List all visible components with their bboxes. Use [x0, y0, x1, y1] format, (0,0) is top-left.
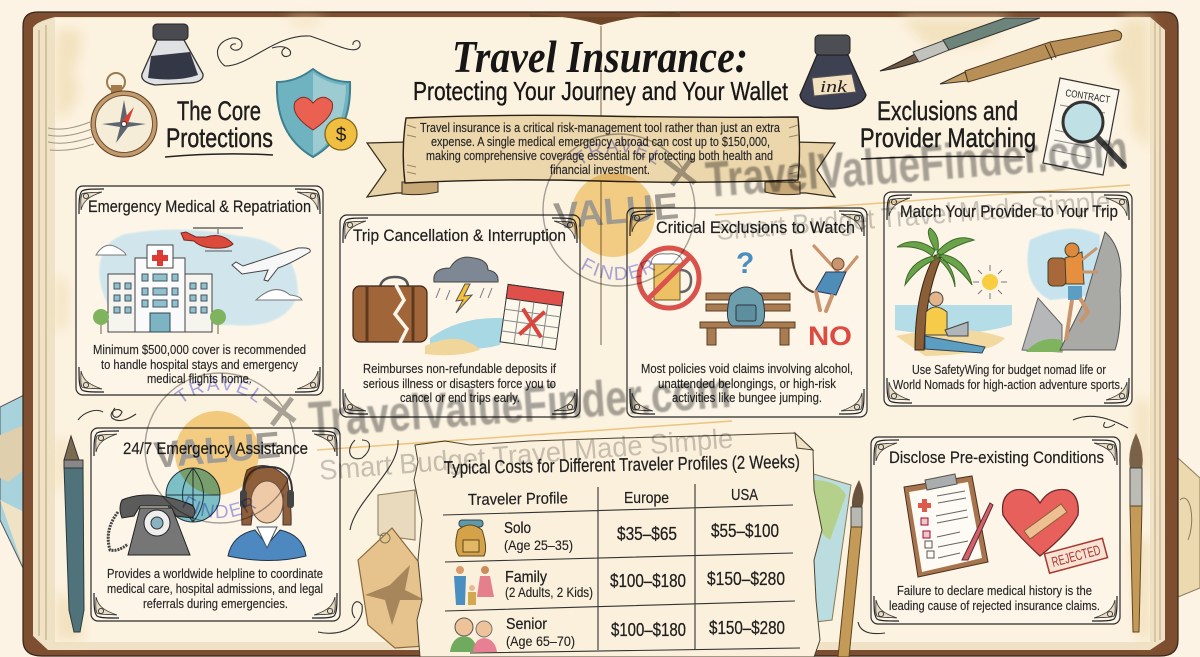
icon: compass [91, 73, 157, 157]
intro text: expense. A single medical emergency abroad can cost up to $150,000, [431, 134, 770, 149]
icon: rotary telephone [108, 495, 195, 555]
body text: cancel or end trips early. [400, 390, 520, 405]
heading: Critical Exclusions to Watch [656, 218, 855, 237]
panel: typical costs table [414, 433, 822, 657]
heading: the core protections: The Core [177, 96, 261, 126]
body text: unattended belongings, or high-risk [658, 376, 836, 391]
stamp: rejected [1044, 538, 1108, 573]
illustration: rock climber [1022, 229, 1121, 352]
illustration: broken suitcase, storm and calendar [353, 257, 564, 355]
watermark: travel value finder bottom: TRAVEL [174, 376, 259, 403]
body text [107, 566, 323, 611]
illustration: hospital, helicopter and plane [93, 228, 310, 334]
table header: Europe [624, 490, 669, 507]
body text: serious illness or disasters force you to [363, 376, 556, 391]
illustration: palm tree and laptop on beach [895, 228, 1012, 356]
row: family: (2 Adults, 2 Kids) [505, 584, 593, 600]
icon: ink bottle right: ink [820, 77, 848, 96]
body text: Provides a worldwide helpline to coordinate [107, 566, 323, 581]
body text: medical care, hospital admissions, and legal [107, 581, 323, 596]
panel: emergency medical and repatriation [76, 186, 323, 395]
watermark: travel value finder top: TRAVEL [573, 138, 658, 165]
decorative swirls [78, 408, 1128, 634]
watermark: travel value finder bottom: VALUE [152, 424, 282, 476]
intro text [420, 120, 781, 177]
icon: backpack [456, 520, 486, 556]
icon: seniors [450, 618, 497, 652]
icon: map behind table [790, 470, 851, 625]
icon: clipboard [904, 474, 993, 577]
body text: Minimum $500,000 cover is recommended [93, 342, 306, 357]
body text: leading cause of rejected insurance claims. [889, 598, 1100, 613]
panel: critical exclusions to watch [627, 208, 867, 417]
icon: luggage tag with compass rose [358, 490, 440, 648]
heading: Trip Cancellation & Interruption [353, 226, 566, 245]
watermark: travel value finder top [542, 120, 1130, 287]
postmark lines [48, 122, 94, 150]
watermark: travel value finder bottom: TravelValueFinder.com [307, 362, 733, 448]
left map scrap [0, 395, 24, 570]
table header: Traveler Profile [468, 490, 568, 509]
right map scrap [1178, 458, 1200, 597]
illustration: bench, backpack and question mark [700, 247, 795, 345]
watermark: travel value finder bottom: Smart Budget Travel Made Simple [318, 423, 734, 486]
row: solo: (Age 25–35) [504, 537, 573, 553]
row: family: $150–$280 [707, 569, 785, 589]
table header: USA [731, 487, 758, 504]
heading: exclusions and provider matching [860, 96, 1036, 159]
body text: Use SafetyWing for budget nomad life or [912, 362, 1106, 377]
icon: globe [166, 468, 220, 522]
watermark: travel value finder top: FINDER [581, 258, 656, 280]
row: solo: $35–$65 [617, 524, 677, 544]
row: solo: $55–$100 [711, 521, 779, 541]
intro text: financial investment. [550, 162, 650, 177]
table title: Typical Costs for Different Traveler Profiles (2 Weeks) [444, 451, 800, 478]
heading: exclusions and provider matching: Provider Matching [860, 123, 1036, 153]
body text [889, 583, 1100, 613]
body text: Reimburses non-refundable deposits if [363, 361, 556, 376]
heading: exclusions and provider matching: Exclusions and [877, 96, 1018, 126]
icon: contract and magnifier: CONTRACT [1065, 88, 1111, 106]
row: solo: Solo [504, 520, 531, 537]
row: senior [450, 616, 785, 652]
body text [893, 362, 1123, 392]
body text: Most policies void claims involving alcohol, [641, 361, 853, 376]
table grid [443, 484, 800, 653]
panel: match your provider to your trip [884, 192, 1132, 406]
ribbon tails [367, 142, 408, 197]
intro ribbon banner [367, 115, 835, 197]
watermark: travel value finder top: Smart Budget Travel Made Simple [715, 185, 1111, 246]
intro text: Travel insurance is a critical risk-management tool rather than just an extra [420, 120, 781, 135]
heading: Emergency Medical & Repatriation [88, 197, 311, 216]
icon: brush beside table [838, 480, 863, 657]
icon: contract and magnifier [1043, 78, 1124, 175]
body text [641, 361, 853, 405]
heading: Match Your Provider to Your Trip [900, 202, 1118, 221]
book spine [600, 26, 602, 345]
title: Protecting Your Journey and Your Wallet [413, 76, 789, 106]
icon: ink bottle left [142, 24, 203, 85]
watermark: travel value finder top: VALUE [552, 185, 680, 237]
heading: 24/7 Emergency Assistance [123, 439, 308, 458]
illustration: no alcohol sign [639, 248, 699, 308]
icon: right paintbrush [1129, 433, 1143, 632]
watermark: travel value finder bottom: FINDER [182, 496, 256, 518]
body text: activities like bungee jumping. [672, 390, 822, 405]
illustration: bungee jumper [791, 246, 857, 311]
body text: World Nomads for high-action adventure sports. [893, 377, 1123, 392]
body text: to handle hospital stays and emergency [101, 357, 298, 372]
row: solo [456, 520, 779, 556]
title [413, 31, 789, 106]
icon: shield with heart and coin: $ [336, 125, 347, 146]
icon: paintbrush [880, 18, 1040, 71]
row: senior: (Age 65–70) [506, 633, 575, 649]
row: family [454, 566, 785, 605]
NO label: NO [808, 321, 852, 351]
icon: shield with heart and coin [277, 69, 357, 157]
table header [468, 487, 758, 509]
body text [93, 342, 306, 386]
torn paper [414, 433, 822, 657]
row: senior: $100–$180 [611, 620, 686, 640]
panel: 24/7 emergency assistance [91, 428, 340, 621]
heading: the core protections: Protections [166, 123, 273, 153]
body text [363, 361, 556, 405]
icon: support agent [228, 466, 306, 560]
row: senior: $150–$280 [709, 618, 785, 638]
illustration: bench, backpack and question mark: ? [736, 247, 754, 280]
panel: disclose pre-existing conditions [871, 437, 1120, 624]
ribbon curls [402, 182, 800, 195]
row: family: $100–$180 [610, 571, 686, 591]
heading: Disclose Pre-existing Conditions [889, 448, 1104, 467]
icon: family [454, 566, 494, 605]
ribbon body [403, 115, 800, 183]
row: family: Family [505, 569, 547, 586]
watermark: travel value finder bottom [144, 362, 734, 524]
icon: fountain pen [940, 30, 1122, 84]
title: Travel Insurance: [452, 31, 748, 82]
icon: heart with bandage [1002, 490, 1078, 556]
intro text: making comprehensive coverage essential for protecting both health and [426, 148, 773, 163]
row: senior: Senior [506, 616, 548, 633]
panel: trip cancellation and interruption [340, 215, 580, 417]
icon: ink bottle right [800, 35, 866, 109]
body text: Failure to declare medical history is the [897, 583, 1092, 598]
body text: referrals during emergencies. [143, 596, 288, 611]
icon: left fountain pen [64, 436, 84, 632]
heading: the core protections [165, 96, 273, 157]
decorative swirl top [217, 36, 360, 66]
stamp: rejected: REJECTED [1050, 542, 1102, 570]
body text: medical flights home. [147, 371, 252, 386]
